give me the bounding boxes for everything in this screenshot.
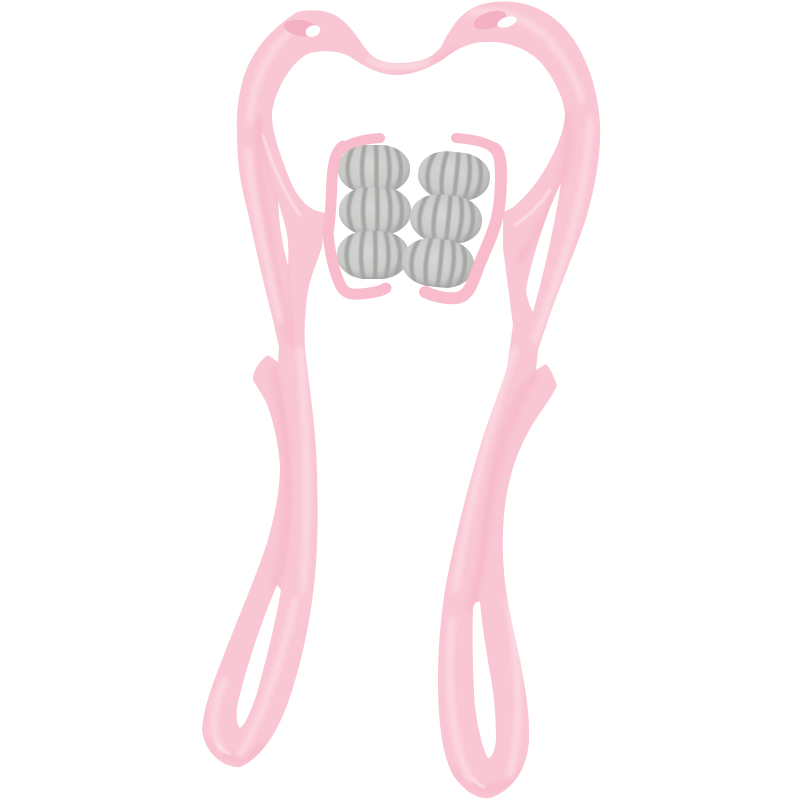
roller: left top (338, 143, 410, 195)
product illustration: neck massager (202, 2, 600, 798)
right roller frame (425, 148, 501, 298)
roller frame top lips (341, 138, 495, 150)
right roller column (399, 146, 493, 293)
roller: right bottom (399, 233, 477, 293)
roller: left bottom (337, 229, 409, 281)
roller: left middle (339, 185, 411, 237)
roller: right middle (407, 189, 485, 249)
shading and gloss on body (212, 11, 590, 789)
left anchor hole (283, 18, 322, 39)
right anchor hole (471, 7, 518, 33)
left roller frame (328, 146, 386, 294)
roller: right top (415, 146, 493, 206)
left roller column (337, 143, 411, 281)
massager body: pink frame (202, 2, 600, 798)
